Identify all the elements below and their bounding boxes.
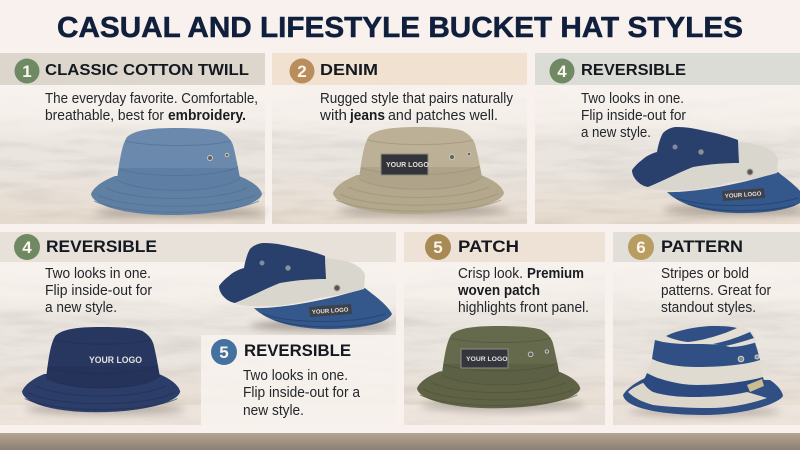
description [243,368,361,419]
badge 2: 2 [297,62,307,81]
badge 6 [628,234,654,260]
description [661,266,771,316]
description: embroidery. [168,108,246,124]
title: CASUAL AND LIFESTYLE BUCKET HAT STYLES [57,12,743,44]
description: The everyday favorite. Comfortable, [45,91,258,107]
badge 6: 6 [636,238,646,257]
header band [272,53,527,85]
header band [535,53,800,85]
description: with [319,108,347,124]
hat: khaki with logo patch [333,127,509,217]
description: Rugged style that pairs naturally [320,91,514,107]
badge 1: 1 [22,62,32,81]
header band [0,232,396,262]
heading: REVERSIBLE [244,341,351,360]
description: Two looks in one. [45,266,151,282]
description: Stripes or bold [661,266,749,282]
description: standout styles. [661,300,756,316]
description: patterns. Great for [661,283,771,299]
description: Two looks in one. [243,368,348,384]
description: woven patch [457,283,540,299]
description: Two looks in one. [581,91,684,107]
heading: PATTERN [661,237,743,256]
description: a new style. [581,125,651,141]
heading: PATCH [458,237,519,256]
hat: reversible flipped [632,127,800,216]
heading: REVERSIBLE [46,237,157,256]
sand backdrop for panels [0,123,800,425]
hat: khaki with logo patch: YOUR LOGO [386,162,429,169]
description: jeans [349,108,385,124]
header band [0,53,265,85]
description [45,91,258,124]
header band [404,232,605,262]
hat: olive with woven patch: YOUR LOGO [466,356,508,363]
badge 5: 5 [433,238,443,257]
badge 5 [211,339,237,365]
header band [613,232,800,262]
heading: REVERSIBLE [581,62,686,79]
description: highlights front panel. [458,300,589,316]
description [581,91,686,141]
hat: reversible flipped [219,243,394,332]
callout: reversible 5 [201,335,396,425]
badge 2 [290,58,314,84]
description: new style. [243,403,304,419]
description: Flip inside-out for [581,108,686,124]
badge 1 [14,58,40,84]
panel: denim [272,53,527,217]
badge 4: 4 [557,62,567,81]
panel: patch [404,232,605,411]
hat: navy with your logo [22,327,185,415]
hat: navy and cream stripes [623,325,783,417]
panel: pattern [613,232,800,417]
hat: navy with your logo: YOUR LOGO [89,355,142,366]
panel: reversible large [0,232,396,425]
heading: DENIM [320,62,378,79]
badge 4: 4 [22,238,32,257]
description [319,91,514,124]
hat: blue cotton twill [91,128,267,218]
description: and patches well. [388,108,498,124]
badge 5: 5 [219,343,229,362]
panel: classic cotton twill [0,53,267,218]
badge 4 [550,58,574,84]
badge 4 [14,234,40,260]
description [45,266,152,316]
description: a new style. [45,300,117,316]
badge 5 [425,234,451,260]
hat: olive with woven patch [417,326,585,411]
description [457,266,589,316]
description: Flip inside-out for a [243,385,361,401]
heading: CLASSIC COTTON TWILL [45,62,249,79]
wooden ledge [0,433,800,450]
panel: reversible top [535,53,800,216]
description: Crisp look. [458,266,523,282]
description: breathable, best for [45,108,164,124]
description: Premium [527,266,584,282]
description: Flip inside-out for [45,283,152,299]
